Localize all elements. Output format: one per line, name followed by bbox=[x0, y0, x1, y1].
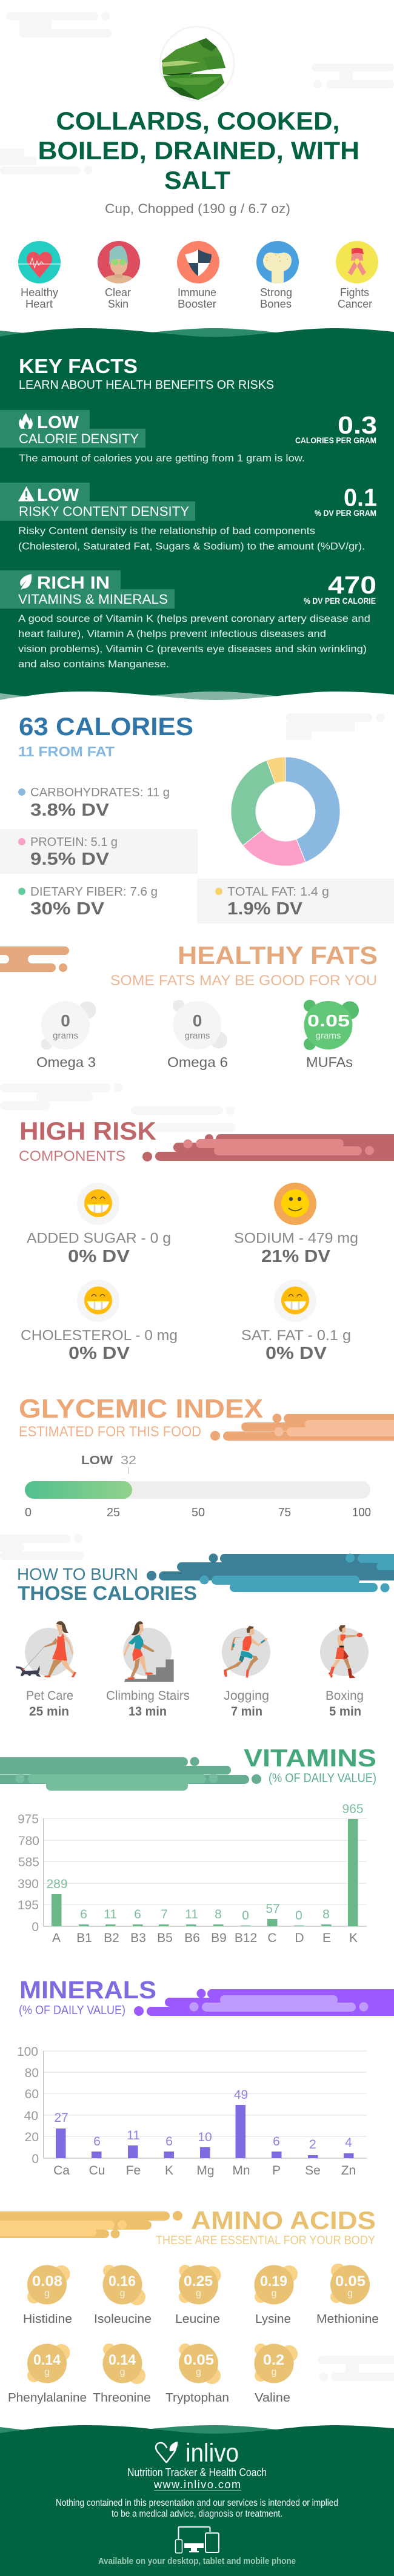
bar chart: minerals: Mg bbox=[196, 2164, 215, 2178]
bar chart: minerals: 6 bbox=[165, 2135, 173, 2148]
bar chart: vitamins: A bbox=[52, 1931, 61, 1945]
amino: leucine: Leucine bbox=[175, 2313, 220, 2326]
heading: high risk: COMPONENTS bbox=[19, 1148, 125, 1164]
logo: inlivo: inlivo bbox=[185, 2439, 239, 2468]
decoration: healthy fats bar bbox=[0, 946, 69, 972]
fact: rich in vitamins and minerals: and also contains Manganese. bbox=[18, 659, 169, 670]
amino: lysine: 0.19 bbox=[260, 2273, 287, 2290]
amino: valine bbox=[255, 2343, 298, 2405]
amino: histidine: Histidine bbox=[23, 2313, 72, 2326]
bar chart: minerals: 11 bbox=[127, 2129, 140, 2142]
bar chart: vitamins: B9 bbox=[211, 1931, 227, 1945]
fact: rich in vitamins and minerals: vision problems), Vitamin C (prevents eye diseases and skin wrinkling) bbox=[18, 644, 367, 655]
icon: boxer bbox=[329, 1625, 362, 1678]
activity labels: 5 min bbox=[329, 1705, 361, 1719]
amino: lysine: g bbox=[272, 2288, 276, 2299]
title: COLLARDS, COOKED, bbox=[56, 107, 339, 135]
panel: key facts bbox=[0, 328, 394, 700]
amino: tryptophan: 0.05 bbox=[184, 2352, 214, 2368]
activity: boxing bbox=[320, 1625, 369, 1678]
glycemic gauge: 50 bbox=[192, 1506, 205, 1519]
heading: calories: 11 FROM FAT bbox=[18, 744, 115, 759]
amino: phenylalanine: g bbox=[44, 2367, 50, 2377]
amino: methionine: Methionine bbox=[316, 2313, 379, 2326]
risk: sodium bbox=[234, 1183, 358, 1266]
bar chart: vitamins: 975 bbox=[18, 1812, 39, 1826]
bar chart: vitamins: 0 bbox=[295, 1909, 302, 1923]
fat: omega 6 bbox=[167, 1000, 228, 1070]
icon: smiling face bbox=[281, 1189, 309, 1217]
heading: key facts: LEARN ABOUT HEALTH BENEFITS OR RISKS bbox=[19, 378, 274, 392]
bar chart: vitamins: 289 bbox=[46, 1877, 68, 1891]
amino: isoleucine bbox=[94, 2265, 152, 2326]
footer tagline: Nutrition Tracker & Health Coach bbox=[127, 2466, 267, 2479]
risk: sodium: SODIUM - 479 mg bbox=[234, 1230, 358, 1246]
fact: risky content density: LOW bbox=[37, 486, 79, 505]
fact: rich in vitamins and minerals: heart failure), Vitamin A (helps prevent infectious diseases and bbox=[18, 629, 326, 639]
activity labels: Pet Care bbox=[26, 1689, 73, 1703]
icon: immune booster bbox=[177, 241, 219, 283]
heading: healthy fats bbox=[110, 941, 378, 989]
icon: strong bones bbox=[256, 241, 299, 285]
amino: leucine: g bbox=[196, 2288, 201, 2299]
activity: pet care bbox=[16, 1621, 76, 1677]
benefit labels: Clear bbox=[105, 286, 131, 299]
risk: added sugar bbox=[27, 1183, 171, 1266]
benefit labels: Fights bbox=[340, 286, 369, 299]
bar chart: vitamins: 195 bbox=[18, 1898, 39, 1912]
bar chart: vitamins: 6 bbox=[134, 1907, 141, 1921]
serving size: Cup, Chopped (190 g / 6.7 oz) bbox=[105, 201, 290, 216]
fact: calorie density: 0.3 bbox=[338, 411, 377, 439]
bar chart: vitamins: C bbox=[267, 1931, 277, 1945]
heading: high risk bbox=[19, 1117, 156, 1164]
decoration: burn bar bbox=[147, 1554, 394, 1593]
bar chart: minerals: P bbox=[272, 2164, 281, 2178]
health benefits row bbox=[18, 241, 378, 310]
amino: tryptophan: g bbox=[196, 2367, 201, 2377]
footer panel bbox=[0, 2425, 394, 2576]
amino: histidine: g bbox=[44, 2288, 50, 2299]
nutrient: dietary fiber bbox=[18, 885, 158, 919]
heading: vitamins: (% OF DAILY VALUE) bbox=[269, 1771, 376, 1785]
amino: lysine bbox=[255, 2265, 298, 2326]
background decoration: cloud beside amino acids bbox=[318, 2356, 394, 2381]
bar chart: minerals: 0 bbox=[32, 2152, 39, 2166]
benefit labels bbox=[21, 286, 372, 310]
amino: threonine: g bbox=[120, 2367, 125, 2377]
bar chart: minerals: Se bbox=[305, 2164, 321, 2178]
amino: histidine bbox=[23, 2265, 72, 2326]
decoration: glycemic bar bbox=[210, 1413, 394, 1441]
fat: omega 3: Omega 3 bbox=[36, 1054, 96, 1070]
bar chart: vitamins: 0 bbox=[32, 1920, 39, 1934]
bar chart: minerals: 100 bbox=[17, 2045, 38, 2059]
benefit labels: Healthy bbox=[21, 286, 58, 299]
bar chart: minerals: 6 bbox=[273, 2135, 280, 2148]
bar chart: vitamins: 57 bbox=[265, 1902, 280, 1916]
fact: risky content density: (Cholesterol, Saturated Fat, Sugars & Sodium) to the amount (%DV/gr). bbox=[18, 541, 365, 552]
bar chart: minerals: Mn bbox=[232, 2164, 250, 2178]
bar chart: minerals: 4 bbox=[345, 2136, 352, 2150]
background decoration: top clouds bbox=[0, 12, 394, 174]
fat: MUFAs: 0.05 bbox=[307, 1011, 350, 1030]
icon: woman walking dog bbox=[16, 1621, 76, 1677]
heading: amino acids bbox=[156, 2206, 376, 2247]
fat: omega 3: 0 bbox=[61, 1011, 70, 1030]
heading: minerals: (% OF DAILY VALUE) bbox=[19, 2004, 125, 2017]
heading: healthy fats: SOME FATS MAY BE GOOD FOR YOU bbox=[110, 973, 377, 989]
heading: vitamins bbox=[244, 1744, 376, 1785]
fat: MUFAs: MUFAs bbox=[306, 1054, 353, 1070]
amino: phenylalanine: 0.14 bbox=[33, 2352, 61, 2368]
bar chart: vitamins: K bbox=[349, 1931, 358, 1945]
heading: calories bbox=[18, 712, 193, 759]
fact: rich in vitamins and minerals bbox=[0, 570, 376, 670]
food image: collard leaves bbox=[160, 27, 234, 101]
fact: calorie density: CALORIES PER GRAM bbox=[295, 435, 376, 445]
amino: tryptophan bbox=[165, 2343, 229, 2405]
heading: minerals bbox=[19, 1976, 156, 2017]
bar chart: minerals: 80 bbox=[25, 2066, 39, 2080]
bar chart: vitamins: B1 bbox=[76, 1931, 92, 1945]
benefit labels: Strong bbox=[260, 286, 292, 299]
background decoration: cloud above burn section bbox=[0, 1534, 84, 1560]
title: BOILED, DRAINED, WITH bbox=[38, 136, 359, 165]
risk: added sugar: 0% DV bbox=[68, 1247, 130, 1266]
amino: isoleucine: Isoleucine bbox=[94, 2313, 152, 2326]
icon: fights cancer bbox=[336, 241, 378, 283]
fact: rich in vitamins and minerals: RICH IN bbox=[37, 573, 110, 593]
panel: high risk components bbox=[19, 1117, 394, 1363]
bar chart: vitamins: 8 bbox=[322, 1907, 330, 1921]
bar chart: vitamins: 0 bbox=[242, 1909, 249, 1923]
fat: omega 3 bbox=[36, 1001, 96, 1070]
activity labels: 7 min bbox=[231, 1705, 262, 1719]
amino: valine: Valine bbox=[255, 2391, 290, 2405]
risk: cholesterol bbox=[21, 1280, 178, 1363]
activity labels: 25 min bbox=[29, 1705, 69, 1719]
benefit labels: Heart bbox=[25, 298, 53, 310]
bar chart: minerals: 20 bbox=[25, 2130, 39, 2144]
fact: calorie density: LOW bbox=[37, 413, 79, 432]
heading: key facts: KEY FACTS bbox=[19, 355, 138, 377]
bar chart: vitamins: 965 bbox=[342, 1802, 364, 1816]
activity labels: Climbing Stairs bbox=[106, 1689, 190, 1703]
footer disclaimer: Nothing contained in this presentation and our services is intended or implied bbox=[56, 2498, 338, 2508]
decoration: minerals bar bbox=[134, 1989, 394, 2016]
bar chart: minerals bbox=[17, 2045, 367, 2178]
amino: phenylalanine bbox=[8, 2343, 87, 2405]
icon: woman climbing stairs bbox=[124, 1621, 174, 1682]
heading: burn calories: THOSE CALORIES bbox=[18, 1582, 197, 1604]
icon: healthy heart bbox=[18, 241, 61, 283]
bar chart: vitamins: B12 bbox=[235, 1931, 257, 1945]
fact: risky content density: 0.1 bbox=[344, 483, 377, 511]
bar chart: vitamins: E bbox=[322, 1931, 331, 1945]
fact: risky content density: RISKY CONTENT DENSITY bbox=[19, 504, 189, 519]
heading: burn calories bbox=[17, 1565, 197, 1604]
decoration: high risk bar bbox=[142, 1134, 394, 1161]
amino: methionine: 0.05 bbox=[335, 2273, 366, 2290]
benefit labels: Booster bbox=[178, 298, 216, 310]
bar chart: minerals: 2 bbox=[309, 2138, 316, 2152]
bar chart: vitamins: 8 bbox=[215, 1907, 222, 1921]
amino: leucine bbox=[175, 2265, 221, 2326]
decoration: amino acids bar bbox=[0, 2211, 182, 2238]
nutrient: protein: PROTEIN: 5.1 g bbox=[30, 836, 118, 849]
fact: calorie density: The amount of calories you are getting from 1 gram is low. bbox=[19, 453, 305, 464]
footer website link: www.inlivo.com bbox=[153, 2479, 241, 2491]
amino: valine: g bbox=[272, 2367, 276, 2377]
bar chart: vitamins: 11 bbox=[185, 1907, 198, 1921]
footer disclaimer: to be a medical advice, diagnosis or treatment. bbox=[112, 2509, 282, 2519]
donut chart bbox=[231, 757, 340, 866]
bar chart: vitamins: 11 bbox=[104, 1907, 117, 1921]
fat: MUFAs bbox=[304, 1000, 359, 1070]
activity labels: 13 min bbox=[129, 1705, 167, 1719]
glycemic gauge: 32 bbox=[121, 1454, 136, 1467]
heading: minerals: MINERALS bbox=[19, 1976, 156, 2004]
glycemic gauge: 75 bbox=[278, 1506, 291, 1519]
icon: leaf bbox=[20, 574, 32, 590]
glycemic gauge: 0 bbox=[25, 1506, 32, 1519]
bar chart: vitamins: 390 bbox=[18, 1877, 39, 1891]
panel: amino acids bbox=[0, 2206, 379, 2405]
footer availability note: Available on your desktop, tablet and mobile phone bbox=[98, 2556, 296, 2566]
fact: risky content density: Risky Content density is the relationship of bad components bbox=[18, 526, 315, 537]
bar chart: vitamins: B5 bbox=[157, 1931, 173, 1945]
glycemic gauge: 100 bbox=[352, 1506, 371, 1519]
heading: burn calories: HOW TO BURN bbox=[17, 1565, 138, 1584]
activity labels bbox=[26, 1689, 364, 1719]
heading: amino acids: AMINO ACIDS bbox=[191, 2206, 376, 2234]
nutrient: carbohydrates: CARBOHYDRATES: 11 g bbox=[30, 786, 170, 799]
title bbox=[38, 107, 359, 194]
bar chart: minerals: 60 bbox=[25, 2087, 39, 2101]
amino: methionine bbox=[316, 2264, 379, 2326]
bar chart: vitamins: D bbox=[295, 1931, 304, 1945]
amino: threonine bbox=[93, 2343, 151, 2405]
risk: added sugar: ADDED SUGAR - 0 g bbox=[27, 1230, 171, 1246]
fat: omega 6: Omega 6 bbox=[167, 1054, 228, 1070]
bar chart: minerals: Fe bbox=[126, 2164, 141, 2178]
heading: calories: 63 CALORIES bbox=[19, 712, 193, 741]
bar chart: vitamins: B3 bbox=[130, 1931, 146, 1945]
icon: runner bbox=[224, 1626, 268, 1678]
fact: rich in vitamins and minerals: A good source of Vitamin K (helps prevent coronary artery disease and bbox=[18, 613, 370, 624]
nutrient: protein bbox=[0, 829, 198, 874]
bar chart: vitamins: 780 bbox=[18, 1834, 39, 1848]
heading: high risk: HIGH RISK bbox=[19, 1117, 156, 1145]
activity labels: Boxing bbox=[326, 1689, 364, 1703]
panel: minerals bbox=[17, 1976, 394, 2178]
icon: grinning face bbox=[84, 1189, 112, 1217]
fact: calorie density: CALORIE DENSITY bbox=[19, 431, 139, 446]
icon: grinning face bbox=[84, 1286, 112, 1314]
fact: rich in vitamins and minerals: 470 bbox=[328, 571, 376, 599]
fact: calorie density bbox=[0, 410, 377, 464]
amino: methionine: g bbox=[347, 2288, 353, 2299]
amino: tryptophan: Tryptophan bbox=[165, 2391, 229, 2405]
fat: omega 6: grams bbox=[185, 1031, 210, 1041]
bar chart: minerals: 40 bbox=[24, 2109, 38, 2123]
amino: threonine: 0.14 bbox=[109, 2352, 136, 2368]
glycemic gauge: 25 bbox=[107, 1506, 120, 1519]
activity: jogging bbox=[222, 1626, 270, 1678]
nutrient: protein: 9.5% DV bbox=[30, 850, 110, 869]
amino: valine: 0.2 bbox=[263, 2352, 284, 2368]
bar chart: minerals: K bbox=[165, 2164, 173, 2178]
nutrient: total fat bbox=[197, 879, 394, 923]
risk: saturated fat: 0% DV bbox=[265, 1344, 327, 1363]
footer disclaimer bbox=[56, 2498, 338, 2519]
risk: sodium: 21% DV bbox=[261, 1247, 331, 1266]
background decoration: calories cloud bbox=[286, 713, 384, 740]
icon: devices bbox=[176, 2527, 219, 2553]
icon: flame bbox=[19, 413, 33, 429]
background decoration: clouds above high risk bbox=[0, 1083, 235, 1132]
heading: amino acids: THESE ARE ESSENTIAL FOR YOUR BODY bbox=[156, 2234, 375, 2247]
risk: saturated fat: SAT. FAT - 0.1 g bbox=[241, 1327, 351, 1344]
glycemic gauge: LOW bbox=[81, 1454, 113, 1467]
risk: cholesterol: 0% DV bbox=[68, 1344, 130, 1363]
bar chart: minerals: Zn bbox=[341, 2164, 356, 2178]
heading: glycemic index: GLYCEMIC INDEX bbox=[19, 1394, 263, 1424]
bar chart: minerals: Cu bbox=[89, 2164, 105, 2178]
heading: glycemic index: ESTIMATED FOR THIS FOOD bbox=[19, 1424, 201, 1440]
panel: how to burn those calories bbox=[16, 1554, 394, 1719]
icon: clear skin bbox=[98, 241, 140, 287]
glycemic gauge bbox=[25, 1454, 371, 1519]
benefit labels: Skin bbox=[108, 298, 129, 310]
icon: warning triangle bbox=[18, 486, 35, 501]
panel: glycemic index bbox=[19, 1394, 394, 1519]
amino: histidine: 0.08 bbox=[32, 2273, 62, 2290]
amino: phenylalanine: Phenylalanine bbox=[8, 2391, 87, 2405]
fact: risky content density: % DV PER GRAM bbox=[315, 508, 376, 518]
heading: vitamins: VITAMINS bbox=[244, 1744, 376, 1772]
bar chart: minerals: 10 bbox=[198, 2130, 212, 2144]
nutrient: total fat: TOTAL FAT: 1.4 g bbox=[227, 885, 329, 899]
fact: rich in vitamins and minerals: VITAMINS & MINERALS bbox=[18, 592, 168, 607]
nutrient: carbohydrates bbox=[18, 786, 170, 820]
logo: inlivo bbox=[156, 2439, 239, 2468]
bar chart: minerals: 49 bbox=[234, 2088, 248, 2102]
nutrient: dietary fiber: 30% DV bbox=[30, 899, 105, 919]
benefit labels: Bones bbox=[260, 298, 292, 310]
activity: climbing stairs bbox=[123, 1621, 174, 1682]
heading: healthy fats: HEALTHY FATS bbox=[178, 941, 378, 969]
bar chart: minerals: Ca bbox=[53, 2164, 70, 2178]
title: SALT bbox=[164, 166, 230, 194]
panel: calories bbox=[0, 712, 394, 923]
bar chart: vitamins: 585 bbox=[18, 1855, 39, 1869]
fat: omega 6: 0 bbox=[193, 1011, 202, 1030]
fat: omega 3: grams bbox=[53, 1031, 78, 1041]
fact: rich in vitamins and minerals: % DV PER CALORIE bbox=[304, 596, 376, 606]
icon: grinning face bbox=[281, 1286, 309, 1314]
risk: saturated fat bbox=[241, 1280, 351, 1363]
fact: risky content density bbox=[0, 483, 377, 552]
nutrient: dietary fiber: DIETARY FIBER: 7.6 g bbox=[30, 885, 158, 899]
bar chart: minerals: 6 bbox=[93, 2135, 101, 2148]
fat: MUFAs: grams bbox=[316, 1031, 341, 1041]
amino: threonine: Threonine bbox=[93, 2391, 151, 2405]
decoration: vitamins bar bbox=[0, 1757, 261, 1791]
bar chart: minerals: 27 bbox=[54, 2111, 68, 2125]
heading: glycemic index bbox=[19, 1394, 263, 1440]
panel: healthy fats bbox=[0, 941, 378, 1070]
risk: cholesterol: CHOLESTEROL - 0 mg bbox=[21, 1327, 178, 1344]
benefit labels: Immune bbox=[178, 286, 216, 299]
panel: vitamins bbox=[0, 1744, 376, 1945]
amino: isoleucine: g bbox=[120, 2288, 125, 2299]
nutrient: carbohydrates: 3.8% DV bbox=[30, 801, 110, 820]
benefit labels: Cancer bbox=[338, 298, 372, 310]
bar chart: vitamins bbox=[18, 1802, 367, 1945]
amino: isoleucine: 0.16 bbox=[109, 2273, 136, 2290]
bar chart: vitamins: 6 bbox=[80, 1907, 87, 1921]
nutrient: total fat: 1.9% DV bbox=[227, 899, 303, 919]
bar chart: vitamins: B2 bbox=[104, 1931, 119, 1945]
activity labels: Jogging bbox=[224, 1689, 269, 1703]
bar chart: vitamins: 7 bbox=[161, 1907, 168, 1921]
amino: leucine: 0.25 bbox=[184, 2273, 213, 2290]
heading: key facts bbox=[19, 355, 274, 392]
bar chart: vitamins: B6 bbox=[184, 1931, 200, 1945]
amino: lysine: Lysine bbox=[255, 2313, 291, 2326]
